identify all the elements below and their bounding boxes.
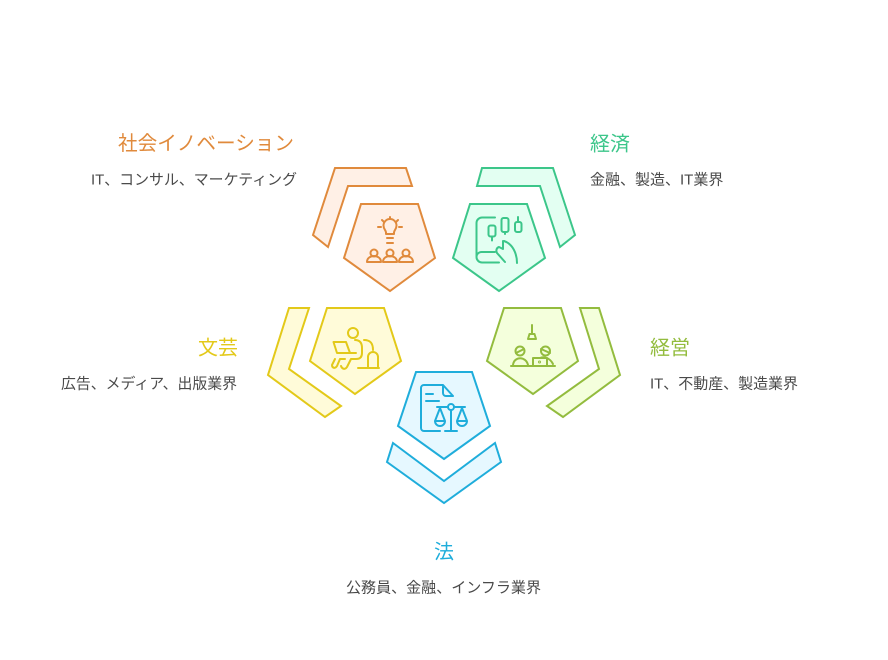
pentagon blue (398, 372, 490, 459)
pentagon lime (487, 308, 578, 394)
panel: 経済 (453, 132, 723, 291)
description: IT、不動産、製造業界 (650, 376, 798, 392)
outer bracket green (477, 168, 575, 247)
outer bracket orange (313, 168, 412, 247)
outer bracket yellow (268, 308, 341, 417)
heading: 法 (434, 540, 454, 564)
heading: 社会イノベーション (118, 132, 294, 155)
panel: 経営 (487, 308, 798, 417)
heading: 経営 (650, 336, 690, 360)
panel: 社会イノベーション (91, 132, 435, 291)
icon: two people at a desk (511, 325, 555, 366)
pentagon green (453, 204, 545, 291)
panel: 法 (346, 372, 541, 596)
pentagon yellow (310, 308, 401, 394)
heading: 文芸 (198, 336, 238, 360)
description: IT、コンサル、マーケティング (91, 172, 297, 188)
icon: person writing on laptop (332, 328, 379, 369)
icon: light bulb and people (367, 217, 413, 262)
pentagon orange (344, 204, 435, 291)
panel: 文芸 (61, 308, 401, 417)
heading: 経済 (590, 132, 630, 156)
icon: document and scales (421, 385, 467, 431)
description: 広告、メディア、出版業界 (61, 374, 237, 392)
outer bracket lime (547, 308, 620, 417)
icon: tablet with candlestick chart (476, 217, 522, 263)
outer chevron blue (387, 443, 501, 503)
description: 金融、製造、IT業界 (590, 172, 723, 188)
description: 公務員、金融、インフラ業界 (346, 580, 541, 596)
